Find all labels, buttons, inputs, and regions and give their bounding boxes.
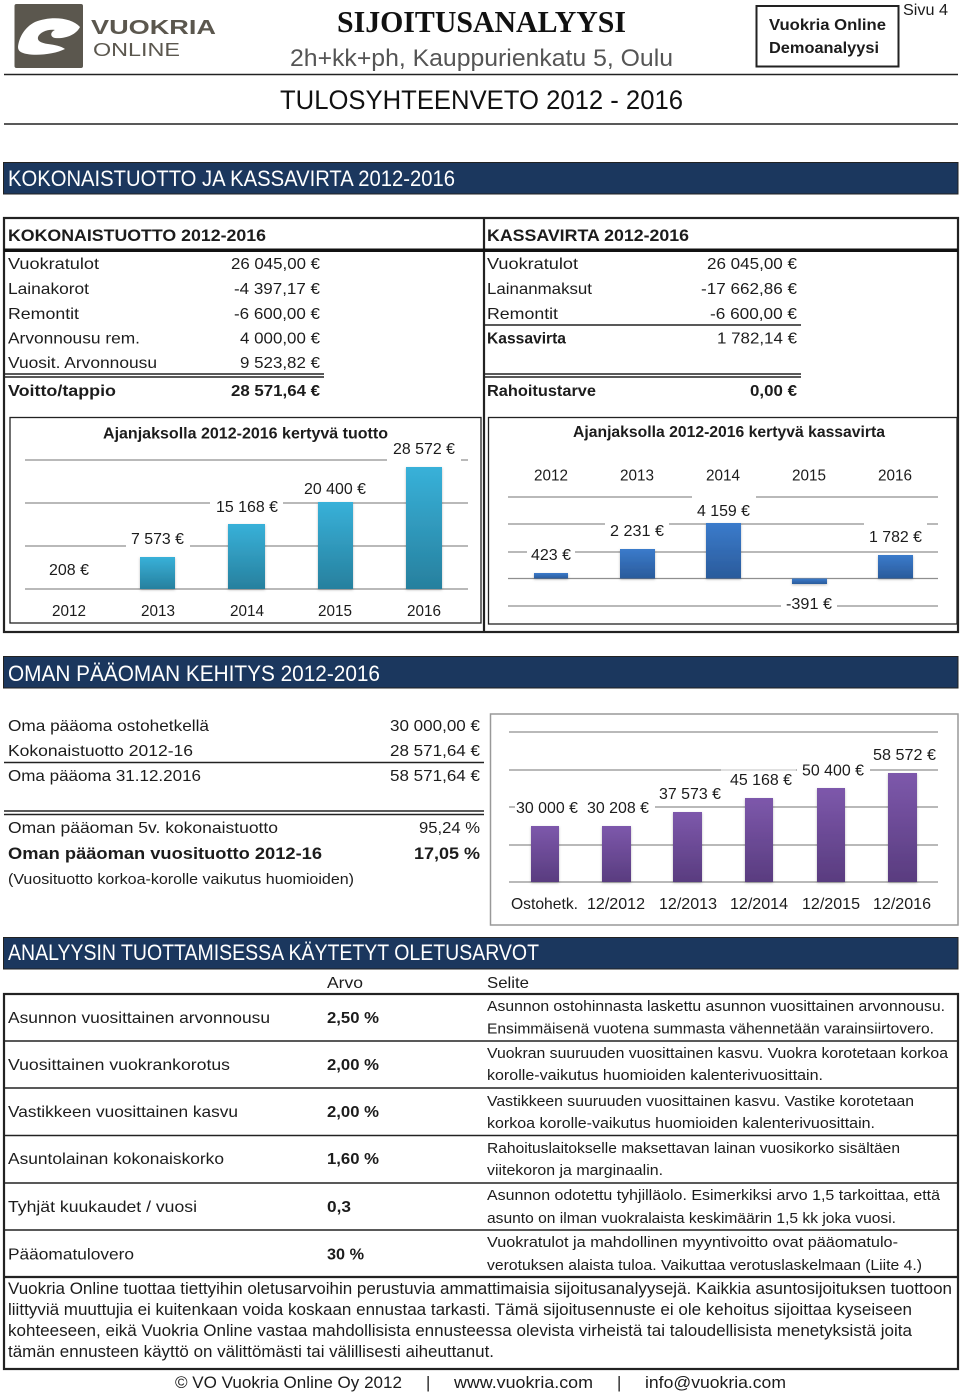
disclaimer	[8, 1280, 952, 1361]
table: Kokonaistuotto: -6 600,00 €	[234, 306, 320, 323]
axis labels	[511, 896, 931, 913]
table: Kokonaistuotto	[4, 226, 324, 400]
table: Kokonaistuotto: 9 523,82 €	[240, 355, 320, 372]
value labels	[531, 503, 922, 613]
value labels: 208 €	[49, 562, 89, 579]
axis years	[52, 603, 441, 620]
axis labels: 12/2014	[730, 896, 788, 913]
table: oma pääoma: Oman pääoman 5v. kokonaistuotto	[8, 820, 278, 837]
axis years: 2014	[706, 468, 740, 484]
title: Sijoitusanalyysi: SIJOITUSANALYYSI	[337, 4, 626, 39]
table: oma pääoma: 28 571,64 €	[390, 743, 480, 760]
footer: |	[426, 1374, 430, 1392]
row: pääomatulovero: Pääomatulovero	[8, 1246, 134, 1264]
table: Kassavirta	[484, 226, 801, 400]
section bar: Oletusarvot: ANALYYSIN TUOTTAMISESSA KÄYTETYT OLETUSARVOT	[8, 940, 539, 965]
value labels: 30 208 €	[587, 800, 649, 817]
bar chart: kertyvä tuotto	[10, 418, 481, 623]
section bar: Kokonaistuotto ja kassavirta: KOKONAISTUOTTO JA KASSAVIRTA 2012-2016	[8, 166, 455, 191]
row: pääomatulovero	[8, 1235, 922, 1274]
value labels: 58 572 €	[873, 747, 936, 764]
header	[4, 2, 958, 124]
chart title: Ajanjaksolla 2012-2016 kertyvä tuotto	[103, 426, 388, 442]
table: Kokonaistuotto: Remontit	[8, 306, 80, 323]
table: Kokonaistuotto: Arvonnousu rem.	[8, 330, 140, 348]
table: oma pääoma: Oma pääoma 31.12.2016	[8, 768, 201, 785]
value labels: 1 782 €	[869, 529, 922, 546]
table: oma pääoma: 58 571,64 €	[390, 768, 480, 785]
table: oma pääoma: (Vuosituotto korkoa-korolle vaikutus huomioiden)	[8, 871, 354, 888]
row: arvonnousu: Ensimmäisenä vuotena summasta vähennetään varainsiirtovero.	[487, 1022, 934, 1038]
table: Kassavirta: Lainanmaksut	[487, 281, 593, 298]
logo	[14, 4, 216, 68]
table: Kassavirta: Vuokratulot	[487, 256, 579, 273]
section bar: Oletusarvot	[4, 938, 958, 969]
bars	[140, 467, 442, 589]
bar chart: kertyvä kassavirta	[488, 418, 957, 624]
table: Kassavirta: KASSAVIRTA 2012-2016	[487, 226, 689, 245]
row: lainakorko	[8, 1141, 900, 1179]
table: Kokonaistuotto: Vuosit. Arvonnousu	[8, 355, 157, 372]
axis years: 2016	[878, 468, 912, 484]
value labels	[516, 747, 936, 817]
value labels: 15 168 €	[216, 499, 278, 516]
value labels: 37 573 €	[659, 786, 721, 803]
table: oma pääoma: 95,24 %	[419, 820, 480, 837]
demo box: Demoanalyysi	[769, 40, 879, 57]
table: Kassavirta: 26 045,00 €	[707, 256, 797, 273]
disclaimer: tämän ennusteen käyttö on välittömästi tai välillisesti aiheuttanut.	[8, 1343, 494, 1361]
bars	[531, 773, 917, 882]
page number: Sivu 4	[903, 2, 948, 19]
logo: VUOKRIA	[91, 17, 216, 39]
value labels: 20 400 €	[304, 481, 366, 498]
row: arvonnousu: Asunnon ostohinnasta laskettu asunnon vuosittainen arvonnousu.	[487, 999, 945, 1015]
table: Kassavirta: 0,00 €	[750, 383, 797, 400]
row: vuokrankorotus: Vuosittainen vuokrankorotus	[8, 1057, 230, 1074]
axis years: 2014	[230, 603, 264, 620]
footer: © VO Vuokria Online Oy 2012	[175, 1374, 402, 1392]
axis years: 2015	[792, 468, 826, 484]
row: pääomatulovero: Vuokratulot ja mahdollinen myyntivoitto ovat pääomatulo-	[487, 1235, 898, 1251]
property subtitle: 2h+kk+ph, Kauppurienkatu 5, Oulu	[290, 45, 673, 72]
subtitle: Tulosyhteenveto: TULOSYHTEENVETO 2012 - 2016	[280, 85, 683, 115]
table: oma pääoma: 17,05 %	[414, 844, 480, 863]
column headers: Selite	[487, 975, 529, 992]
row: vuokrankorotus: korolle-vaikutus huomioiden kalenterivuosittain.	[487, 1068, 823, 1084]
table: Kokonaistuotto: KOKONAISTUOTTO 2012-2016	[8, 226, 266, 245]
row: vuokrankorotus: Vuokran suuruuden vuosittainen kasvu. Vuokra korotetaan korkoa	[487, 1046, 949, 1062]
value labels: 7 573 €	[131, 531, 184, 548]
value labels: 423 €	[531, 547, 571, 564]
axis years: 2013	[620, 468, 654, 484]
row: vastike: Vastikkeen suuruuden vuosittainen kasvu. Vastike korotetaan	[487, 1094, 914, 1110]
value labels: 4 159 €	[697, 503, 750, 520]
footer	[175, 1374, 786, 1392]
axis years	[534, 468, 912, 484]
row: arvonnousu: 2,50 %	[327, 1010, 379, 1027]
table: Kokonaistuotto: 4 000,00 €	[240, 330, 320, 348]
column headers: Arvo	[327, 975, 363, 992]
bar chart: oman pääoman kehitys	[490, 714, 958, 925]
logo: ONLINE	[93, 40, 180, 60]
axis years: 2012	[52, 603, 86, 620]
section bar: Oman pääoman kehitys: OMAN PÄÄOMAN KEHITYS 2012-2016	[8, 661, 380, 686]
row: vastike: Vastikkeen vuosittainen kasvu	[8, 1104, 238, 1121]
table: Kassavirta: Kassavirta	[487, 330, 566, 348]
table: Kokonaistuotto: 28 571,64 €	[231, 383, 320, 400]
row: tyhjät kuukaudet: Tyhjät kuukaudet / vuosi	[8, 1199, 197, 1216]
section bar: Kokonaistuotto ja kassavirta	[4, 162, 958, 194]
disclaimer: kohteeseen, eikä Vuokria Online vastaa mahdollisista ennusteessa olevista virheistä tai taloudellisista menetyksistä joita	[8, 1322, 913, 1340]
axis labels: 12/2012	[587, 896, 645, 913]
axis years: 2015	[318, 603, 352, 620]
chart title: Ajanjaksolla 2012-2016 kertyvä kassavirta	[573, 424, 885, 441]
value labels: -391 €	[786, 596, 832, 613]
row: arvonnousu: Asunnon vuosittainen arvonnousu	[8, 1010, 270, 1027]
value labels: 45 168 €	[730, 772, 792, 789]
table: oma pääoma: Kokonaistuotto 2012-16	[8, 743, 193, 760]
value labels: 30 000 €	[516, 800, 578, 817]
row: pääomatulovero: 30 %	[327, 1246, 364, 1264]
row: tyhjät kuukaudet: asunto on ilman vuokralaista keskimäärin 1,5 kk joka vuosi.	[487, 1211, 896, 1227]
row: lainakorko: Rahoituslaitokselle maksettavan lainan vuosikorko sisältäen	[487, 1141, 900, 1157]
table: oma pääoma: Oman pääoman vuosituotto 2012-16	[8, 844, 322, 863]
value labels: 28 572 €	[393, 441, 455, 458]
axis labels: 12/2015	[802, 896, 860, 913]
row: tyhjät kuukaudet: Asunnon odotettu tyhjilläolo. Esimerkiksi arvo 1,5 tarkoittaa, että	[487, 1188, 941, 1204]
row: vastike	[8, 1094, 914, 1132]
section bar: Oman pääoman kehitys	[4, 656, 958, 688]
demo box: Vuokria Online	[769, 17, 886, 34]
row: arvonnousu	[8, 999, 945, 1038]
axis labels: 12/2016	[873, 896, 931, 913]
row: tyhjät kuukaudet	[8, 1188, 941, 1227]
row: lainakorko: 1,60 %	[327, 1151, 379, 1168]
disclaimer: Vuokria Online tuottaa tiettyihin oletusarvoihin perustuvia ammattimaisia sijoitusanalyysejä. Kaikkia asuntosijoituksen tuottoon	[8, 1280, 952, 1298]
table: Kokonaistuotto: Vuokratulot	[8, 256, 100, 273]
bars	[534, 523, 913, 584]
table: Kokonaistuotto: Lainakorot	[8, 281, 90, 298]
row: pääomatulovero: verotuksen alaista tuloa. Vaikuttaa verotuslaskelmaan (Liite 4.)	[487, 1258, 922, 1274]
row: vuokrankorotus: 2,00 %	[327, 1057, 379, 1074]
table: oma pääoma: 30 000,00 €	[390, 718, 480, 735]
axis years: 2013	[141, 603, 175, 620]
demo box	[756, 6, 898, 66]
value labels	[49, 441, 455, 579]
table: Kassavirta: -6 600,00 €	[710, 306, 797, 323]
axis labels: 12/2013	[659, 896, 717, 913]
disclaimer: liittyviä muuttujia ei kuitenkaan voida koskaan ennustaa tarkasti. Tämä sijoitusennuste ei ole kehoitus sijoittaa kyseiseen	[8, 1301, 912, 1319]
row: vastike: 2,00 %	[327, 1104, 379, 1121]
row: lainakorko: Asuntolainan kokonaiskorko	[8, 1151, 224, 1168]
axis years: 2012	[534, 468, 568, 484]
axis years: 2016	[407, 603, 441, 620]
panel: tables frame	[4, 218, 958, 632]
footer: www.vuokria.com	[453, 1374, 593, 1392]
table: oma pääoma	[4, 718, 484, 888]
table: Kokonaistuotto: 26 045,00 €	[231, 256, 320, 273]
value labels: 2 231 €	[610, 523, 664, 540]
table: Kokonaistuotto: -4 397,17 €	[234, 281, 320, 298]
axis labels: Ostohetk.	[511, 896, 578, 913]
value labels: 50 400 €	[802, 762, 864, 780]
table: Kassavirta: Remontit	[487, 306, 559, 323]
footer: |	[617, 1374, 621, 1392]
row: tyhjät kuukaudet: 0,3	[327, 1199, 351, 1216]
column headers	[327, 975, 529, 992]
table: oletusarvot	[4, 975, 958, 1369]
table: Kassavirta: Rahoitustarve	[487, 383, 596, 400]
table: Kokonaistuotto: Voitto/tappio	[8, 383, 116, 400]
footer: info@vuokria.com	[645, 1374, 786, 1392]
row: vuokrankorotus	[8, 1046, 949, 1084]
table: oma pääoma: Oma pääoma ostohetkellä	[8, 718, 209, 735]
table: Kassavirta: 1 782,14 €	[717, 330, 797, 348]
row: lainakorko: viitekoron ja marginaalin.	[487, 1163, 663, 1179]
row: vastike: korkoa korolle-vaikutus huomioiden kalenterivuosittain.	[487, 1116, 875, 1132]
table: Kassavirta: -17 662,86 €	[701, 281, 797, 298]
